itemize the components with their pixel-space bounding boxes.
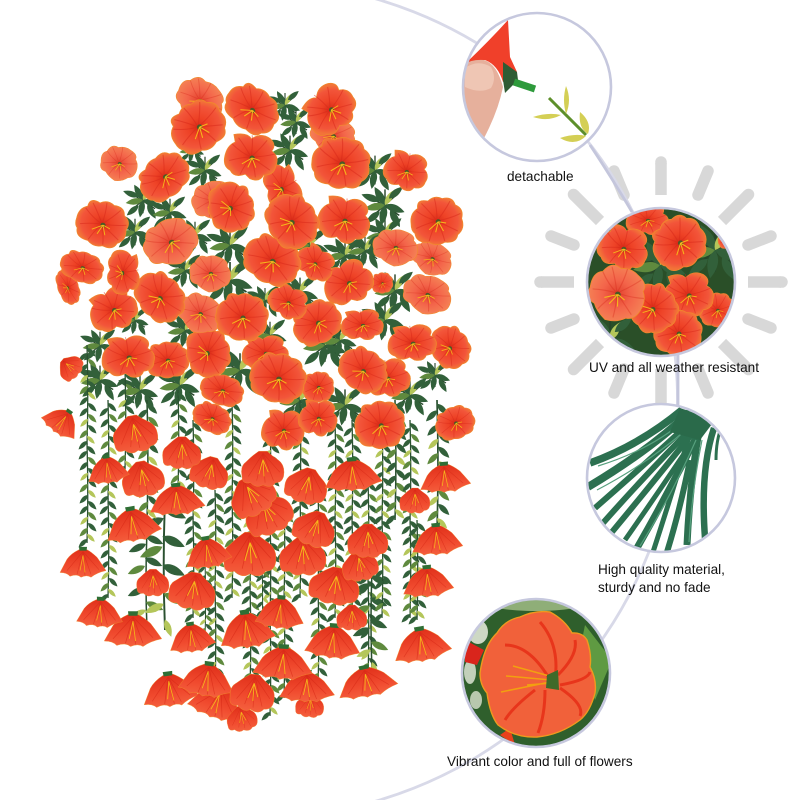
upper foliage [77,89,451,429]
panel: vibrant color [447,595,633,769]
label: Vibrant color and full of flowers [447,754,633,769]
panel: UV and all weather resistant [586,206,759,372]
icon: sun rays [540,162,782,405]
circle background [464,14,610,160]
upper open flowers [52,69,478,412]
circle outline [463,13,611,161]
circle background [463,600,609,746]
label: High quality material, [598,562,725,577]
panel: detachable [462,13,611,184]
circle outline [587,208,735,356]
lower hanging flowers [39,396,479,733]
connecting arc line [375,0,680,800]
circle outline [462,599,610,747]
label: UV and all weather resistant [589,360,759,375]
hanging flower bouquet [39,69,479,733]
label: detachable [507,169,574,184]
circle background [588,209,734,355]
photo: green stems [588,408,722,552]
label second line: sturdy and no fade [598,580,711,595]
circle outline [587,404,735,552]
hanging vines [77,345,451,722]
photo: flower pulled off stem [462,20,589,142]
panel: high quality material [587,404,735,595]
photo: flower cluster [588,209,734,354]
circle background [588,405,734,551]
photo: single flower close-up [464,595,612,745]
